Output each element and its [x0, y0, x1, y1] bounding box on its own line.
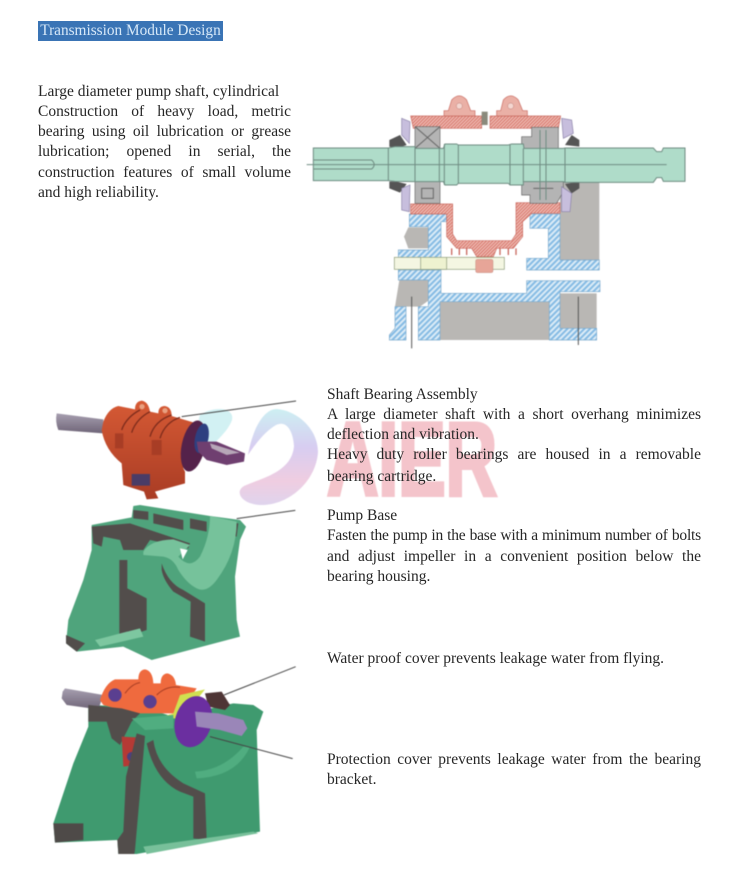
text: shaft bearing assembly: A large diameter shaft with a short overhang minimizes — [327, 406, 701, 423]
text: pump base: Fasten the pump in the base with a minimum number of bolts — [327, 527, 701, 544]
text: shaft bearing assembly: deflection and vibration. — [327, 426, 479, 443]
text: pump base: bearing housing. — [327, 568, 430, 585]
pump base 3D — [66, 505, 295, 660]
text: shaft bearing assembly: bearing cartridge. — [327, 468, 436, 485]
text: intro paragraph: Construction of heavy load, metric — [38, 103, 291, 120]
text: intro paragraph: bearing using oil lubrication or grease — [38, 123, 291, 140]
text: pump base: Pump Base — [327, 507, 397, 524]
green shaft — [313, 144, 685, 185]
text: protection cover — [327, 751, 701, 788]
shaft bearing assembly 3D — [56, 401, 296, 499]
watermark swirl — [195, 409, 318, 505]
red hatched bearing housing — [411, 116, 561, 257]
stud bolt — [394, 257, 504, 269]
blue hatched housing — [389, 214, 600, 340]
title: Transmission Module Design — [40, 22, 221, 39]
text: intro paragraph: lubrication; opened in serial, the — [38, 143, 291, 160]
bearings and seals — [415, 127, 563, 203]
lifting lugs — [444, 96, 527, 116]
cross-section drawing — [307, 96, 685, 348]
text: shaft bearing assembly: Heavy duty roller bearings are housed in a removable — [327, 446, 701, 463]
text: shaft bearing assembly — [327, 386, 701, 485]
text: intro paragraph: and high reliability. — [38, 184, 159, 201]
text: intro paragraph: Large diameter pump shaft, cylindrical — [38, 83, 279, 100]
grey body blocks — [395, 180, 599, 340]
watermark AIER: AIER — [327, 402, 497, 518]
text: pump base — [327, 507, 701, 585]
text: water proof cover: Water proof cover prevents leakage water from flying. — [327, 650, 664, 667]
text: protection cover: bracket. — [327, 771, 376, 788]
text: shaft bearing assembly: Shaft Bearing Assembly — [327, 386, 478, 403]
assembled unit 3D — [53, 667, 296, 854]
text: protection cover: Protection cover prevents leakage water from the bearing — [327, 751, 701, 768]
text: intro paragraph: construction features of small volume — [38, 164, 291, 181]
text: pump base: and adjust impeller in a convenient position below the — [327, 548, 701, 565]
text: intro paragraph — [38, 83, 291, 201]
